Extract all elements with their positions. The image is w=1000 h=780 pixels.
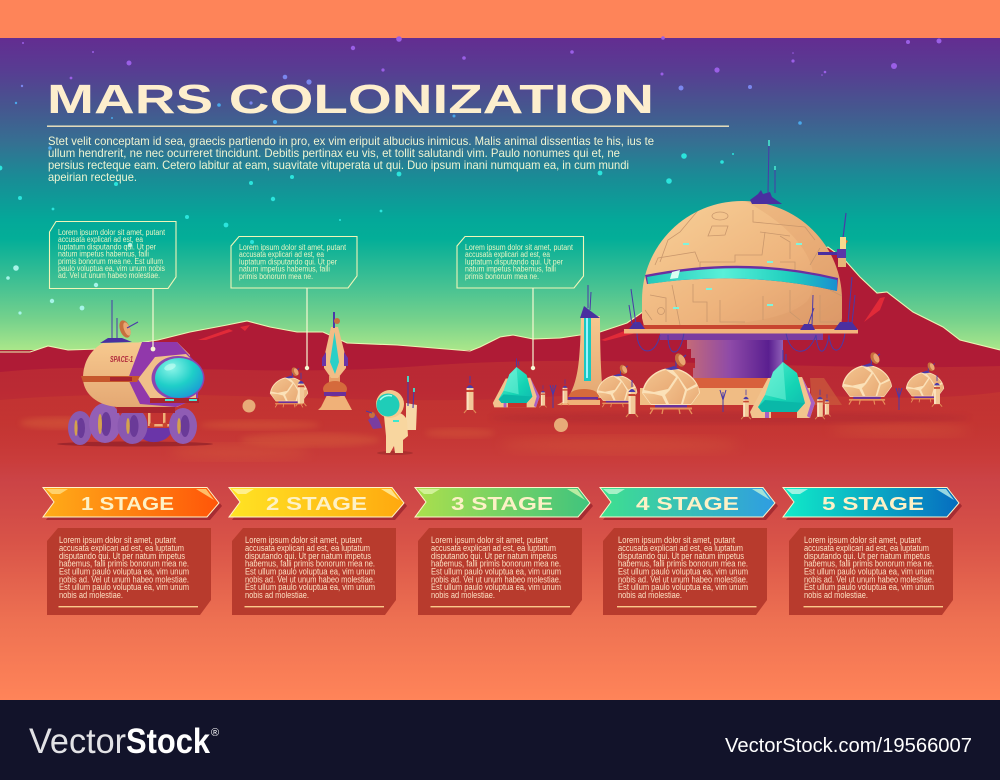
panel: stage 5 text	[789, 528, 953, 615]
panel: stage 3 text: habemus, falli primis bonorum mea ne.	[431, 559, 561, 569]
panel: stage 4 text: Est ullum paulo voluptua ea, vim unum	[618, 566, 748, 576]
panel: stage 5 text: accusata explicari ad est, ea luptatum	[804, 543, 929, 553]
rover nose	[138, 354, 196, 398]
distant mountain range	[0, 247, 1000, 372]
central stem	[660, 333, 823, 378]
stage 4 banner: 4 STAGE	[636, 494, 739, 514]
panel: stage 4 text: Lorem ipsum dolor sit amet, putant	[618, 535, 735, 545]
panel: stage 1 text: Lorem ipsum dolor sit amet, putant	[59, 535, 176, 545]
title: MARS COLONIZATION	[47, 76, 654, 122]
panel: stage 3 text: disputando qui. Ut per natum impetus	[431, 551, 557, 561]
panel: stage 1 text: disputando qui. Ut per natum impetus	[59, 551, 185, 561]
callout 3	[457, 236, 584, 370]
rover undercarriage	[142, 428, 172, 442]
ball centre	[554, 418, 568, 432]
panel: stage 5 text: nobis ad molestiae.	[804, 590, 868, 600]
panel: stage 3 text: Est ullum paulo voluptua ea, vim unum	[431, 566, 561, 576]
sky background	[0, 38, 1000, 358]
rover cabin	[83, 342, 192, 407]
callout 2: accusata explicari ad est, ea	[239, 250, 325, 259]
top salmon band	[0, 0, 1000, 38]
panel: stage 5 text: Est ullum paulo voluptua ea, vim unum	[804, 582, 934, 592]
panel: stage 4 text: disputando qui. Ut per natum impetus	[618, 551, 744, 561]
callout 1	[50, 222, 176, 351]
stage 2 banner: 2 STAGE	[266, 494, 367, 514]
rover	[57, 300, 213, 446]
callout 1: ad. Vel ut unum habeo molestiae.	[58, 271, 160, 280]
rover bumper	[150, 398, 199, 403]
rover shadow	[57, 442, 213, 446]
callout 2: luptatum disputando qui. Ut per	[239, 257, 337, 266]
panel: stage 3 text: Est ullum paulo voluptua ea, vim unum	[431, 582, 561, 592]
glowing band	[645, 266, 838, 291]
footer logo	[29, 722, 219, 761]
panel: stage 3 text: Lorem ipsum dolor sit amet, putant	[431, 535, 548, 545]
panel: stage 2 text: Lorem ipsum dolor sit amet, putant	[245, 535, 362, 545]
panel: stage 3 text: nobis ad. Vel ut unum habeo molestiae.	[431, 574, 561, 584]
intro text: ullum hendrerit, ne nec ocurreret tincidunt. Debitis pertinax eu vis, et tollit salutandi vim. Paulo nonumes qui et, ne	[48, 146, 620, 160]
panel: stage 5 text: habemus, falli primis bonorum mea ne.	[804, 559, 934, 569]
large teal tent	[750, 350, 815, 418]
callout 1: Lorem ipsum dolor sit amet, putant	[58, 228, 166, 237]
platform	[644, 325, 841, 329]
panel: stage 4 text	[603, 528, 767, 615]
main dome habitat	[624, 140, 858, 405]
stage 5 banner: 5 STAGE	[822, 494, 924, 514]
small teal tent	[493, 358, 540, 407]
stars	[0, 36, 942, 315]
callout 3: Lorem ipsum dolor sit amet, putant	[465, 243, 574, 252]
callout 3: luptatum disputando qui. Ut per	[465, 257, 563, 266]
cables	[637, 333, 845, 352]
rover label: SPACE-1	[110, 355, 133, 364]
footer logo: ®	[211, 727, 219, 739]
panel: stage 3 text: accusata explicari ad est, ea luptatum	[431, 543, 556, 553]
callout 2: primis bonorum mea ne.	[239, 272, 313, 281]
martian ground	[0, 350, 1000, 700]
panel: stage 5 text: disputando qui. Ut per natum impetus	[804, 551, 930, 561]
base platform	[640, 377, 842, 405]
panel: stage 5 text: nobis ad. Vel ut unum habeo molestiae.	[804, 574, 934, 584]
footer logo: Vector	[29, 722, 126, 761]
tower left	[318, 312, 352, 410]
panel: stage 2 text: Est ullum paulo voluptua ea, vim unum	[245, 582, 375, 592]
panel: stage 4 text: accusata explicari ad est, ea luptatum	[618, 543, 743, 553]
callout 3: natum impetus habemus, falli	[465, 265, 556, 274]
panel: stage 2 text: Est ullum paulo voluptua ea, vim unum	[245, 566, 375, 576]
footer logo: Stock	[126, 722, 210, 761]
panel: stage 2 text: accusata explicari ad est, ea luptatum	[245, 543, 370, 553]
tower right	[557, 285, 603, 405]
panel: stage 1 text: habemus, falli primis bonorum mea ne.	[59, 559, 189, 569]
stage 3 banner: 3 STAGE	[451, 494, 553, 514]
stage 2 banner	[229, 488, 407, 520]
rover glass	[152, 356, 204, 400]
astronaut	[366, 376, 417, 455]
rover belt	[81, 376, 140, 382]
ground dune shading	[0, 358, 1000, 465]
panel: stage 2 text	[232, 528, 396, 615]
dome circuit lines	[645, 208, 842, 325]
roof hub and antennas	[750, 140, 782, 204]
panel: stage 4 text: habemus, falli primis bonorum mea ne.	[618, 559, 748, 569]
footer bar	[0, 700, 1000, 780]
callout 1: primis bonorum mea ne. Est ullum	[58, 257, 163, 266]
panel: stage 2 text: nobis ad molestiae.	[245, 590, 309, 600]
panel: stage 1 text: accusata explicari ad est, ea luptatum	[59, 543, 184, 553]
callout 1: natum impetus habemus, falli	[58, 250, 149, 259]
rover wheels	[68, 403, 197, 445]
panel: stage 4 text: nobis ad molestiae.	[618, 590, 682, 600]
panel: stage 3 text: nobis ad molestiae.	[431, 590, 495, 600]
platform antennas	[629, 277, 858, 330]
callout 1: luptatum disputando qui. Ut per	[58, 242, 156, 251]
side satellite	[818, 213, 848, 267]
panel: stage 5 text: Lorem ipsum dolor sit amet, putant	[804, 535, 921, 545]
panel: stage 2 text: habemus, falli primis bonorum mea ne.	[245, 559, 375, 569]
stage 1 banner: 1 STAGE	[81, 494, 174, 514]
habitat modules	[270, 351, 944, 414]
footer image id: VectorStock.com/19566007	[725, 735, 972, 757]
panel: stage 1 text: nobis ad. Vel ut unum habeo molestiae.	[59, 574, 189, 584]
dome shell	[642, 201, 842, 326]
panel: stage 1 text: Est ullum paulo voluptua ea, vim unum	[59, 566, 189, 576]
rover chassis	[117, 407, 175, 413]
ball left	[242, 400, 256, 412]
supply tanks	[296, 373, 942, 419]
title underline	[47, 126, 729, 127]
intro text	[48, 134, 654, 184]
callout 1: accusata explicari ad est, ea	[58, 235, 144, 244]
panel: stage 3 text	[418, 528, 582, 615]
rover purple panel	[128, 342, 198, 407]
stage 4 banner	[600, 488, 778, 520]
panel: stage 4 text: nobis ad. Vel ut unum habeo molestiae.	[618, 574, 748, 584]
panel: stage 2 text: nobis ad. Vel ut unum habeo molestiae.	[245, 574, 375, 584]
panel: stage 5 text: Est ullum paulo voluptua ea, vim unum	[804, 566, 934, 576]
intro text: apeirian recteque.	[48, 170, 137, 184]
rover dish	[100, 300, 138, 343]
dome shadow	[690, 201, 842, 326]
callout 2: Lorem ipsum dolor sit amet, putant	[239, 243, 347, 252]
callout 3: primis bonorum mea ne.	[465, 272, 539, 281]
callout 2: natum impetus habemus, falli	[239, 265, 330, 274]
dome windows	[673, 243, 802, 309]
panel: stage 1 text: nobis ad molestiae.	[59, 590, 123, 600]
stage 1 banner	[43, 488, 222, 520]
panel: stage 1 text	[47, 528, 211, 615]
stage 3 banner	[415, 488, 593, 520]
intro text: Stet velit conceptam id sea, graecis partiendo in pro, ex vim eripuit albucius inimicus. Malis animal dissentias te his, ius te	[48, 134, 654, 148]
intro text: persius recteque eam. Cetero labitur at eam, suavitate vituperata ut qui. Duo ipsum inani numquam ea, in cum mundi	[48, 158, 629, 172]
stage 5 banner	[783, 488, 962, 520]
panel: stage 4 text: Est ullum paulo voluptua ea, vim unum	[618, 582, 748, 592]
callout 1: paulo voluptua ea, vim unum nobis	[58, 264, 165, 273]
callout 2	[231, 236, 357, 370]
callout 3: accusata explicari ad est, ea	[465, 250, 551, 259]
panel: stage 2 text: disputando qui. Ut per natum impetus	[245, 551, 371, 561]
panel: stage 1 text: Est ullum paulo voluptua ea, vim unum	[59, 582, 189, 592]
